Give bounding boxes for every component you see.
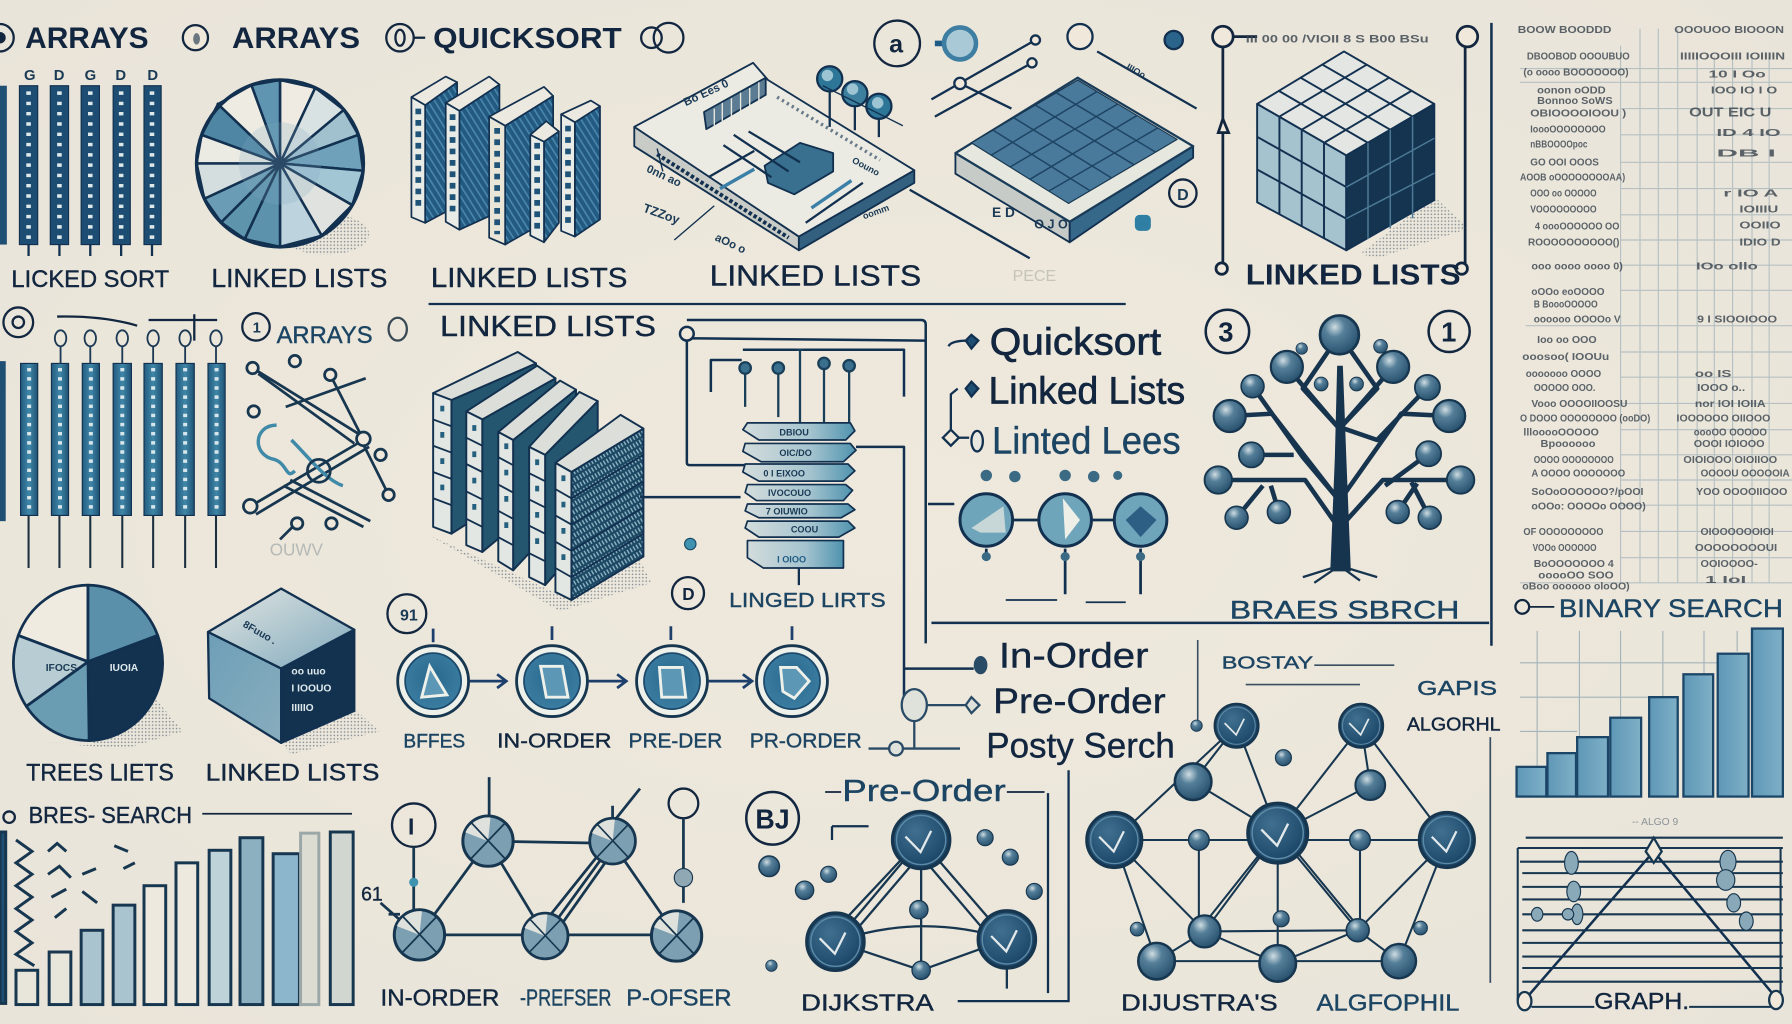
triangle [1525,851,1776,1000]
bars: array columns: G [24,68,36,84]
panel: list labels [943,320,1185,602]
stack: thick books [433,352,643,600]
label: dijkstra: DIJKSTRA [801,989,935,1015]
panel: traversal labels [869,635,1175,766]
icon: number 1 [1429,311,1470,352]
icon: number 3: 3 [1218,317,1234,348]
stack labels: IVOCOUO [768,488,811,498]
table: left column: VOOOOOOOOO [1530,205,1597,216]
edges [1114,726,1447,963]
bars: array columns: D [54,68,65,84]
cube text: IIIIIO [291,703,314,714]
panel: isometric slab [634,21,976,293]
markers [943,335,983,451]
icon: small ring [389,318,407,341]
bars: array columns: D [115,68,126,84]
cube text: oo uuo [291,666,326,677]
small notes: slab margins: Oouno [850,155,882,178]
labels [381,985,731,1011]
caption: bostay [1198,640,1394,723]
table: right column: OOOOOOOOUI [1695,543,1777,554]
bars: array columns: D [147,68,158,84]
tree: nodes [1205,315,1474,529]
table: left column: GO OOI OOOS [1530,158,1599,169]
panel: row 3 cube [206,589,379,787]
heading: quicksort: QUICKSORT [433,23,622,55]
table: left column: lllooooOOOOO [1523,427,1599,438]
process labels: IN-ORDER [497,729,611,752]
bar chart: bars [1517,629,1783,797]
stack labels: I OIOO [777,554,806,564]
small notes: slab margins: TZZoy [641,201,681,227]
label: braes sbrch: BRAES SBRCH [1230,596,1459,624]
icon: circled D [672,577,704,609]
icon: numbered circle: 1 [253,321,261,337]
label: in-order: In-Order [999,635,1149,675]
table: right column: OOOOU OOOOOIA [1701,469,1790,480]
panel: table [1518,25,1792,593]
table: right column: OIOIOOO OIOIIOO [1683,455,1777,466]
process labels: BFFES [403,730,465,752]
label: posty serch: Posty Serch [986,726,1175,766]
squiggles [16,840,135,966]
nodes [394,816,702,961]
grid: table rules [1520,29,1792,583]
icons: top circles [641,21,976,66]
divider: middle horizontal [429,303,1126,305]
pie labels: IFOCS [46,663,77,674]
icon: numbered circle: 91 [400,608,418,625]
bars: array columns: G [85,68,96,84]
label: algfophil: ALGFOPHIL [1317,989,1459,1015]
panel: traversal process [387,594,862,752]
table: right column: IDIO D [1739,238,1781,249]
panel: network one [361,777,731,1011]
table: left column: oonon oODD [1537,86,1606,97]
process labels: PRE-DER [629,729,722,752]
icon: BJ circle: BJ [755,804,790,835]
table: left column: ooosoo( IOOUu [1522,352,1609,363]
chain: three nodes [960,470,1167,602]
table: left column: B BoooOOOOO [1534,299,1598,310]
faded caption: -- ALGO 9 [1632,817,1679,828]
icons: top circles: a [889,31,904,59]
panel: row 1 books [386,23,627,293]
edges [829,840,1007,989]
icon: teal drop [685,538,696,550]
heading: bres search [3,802,352,828]
table: right column [1674,25,1790,586]
notes: plate margin [992,62,1148,232]
table: right column: IOOOOOO OIIOOO [1677,414,1770,425]
bars: array columns [0,68,161,256]
table: right column: IOOO o.. [1697,383,1745,394]
cube text: 8Fuuo . [241,619,278,647]
heading: arrays left: ARRAYS [25,22,149,55]
shadow: stipple [429,535,651,611]
table: left column: nBBOOOOpoc [1530,139,1588,150]
pie labels: IUOIA [110,663,139,674]
table: right column: IOIIIU [1739,205,1778,216]
table: left column: oOOo eoOOOO [1531,287,1605,298]
panel: graph triangle [1518,838,1783,1014]
table: right column: IOO IO I O [1711,86,1777,97]
table: right column: 10 I Oo [1709,70,1766,81]
table: left column: Bpoooooo [1541,439,1595,450]
table: right column: 9 I SIOOIOOO [1697,314,1777,325]
heading: arrays: ARRAYS [277,322,373,349]
pie chart [13,585,163,741]
panel: row 1 pie [183,22,387,293]
heading: pre-order: Pre-Order [842,773,1006,808]
label: linked lists: LINKED LISTS [211,263,387,293]
heading: arrays: ARRAYS [232,22,360,55]
table: right column: IIIIIOOOIII IOIIIIN [1680,51,1785,62]
icon: numbered circle [242,313,270,341]
nodes [759,811,1042,979]
label: linked lists: LINKED LISTS [206,760,379,787]
table: left column: IoooOOOOOOOO [1530,125,1606,136]
table: left column: A OOOO OOOOOOO [1531,469,1625,480]
heading: linked lists: LINKED LISTS [440,311,656,343]
label: dijustra's: DIJUSTRA'S [1121,989,1278,1015]
table: left column: OBIOOOOIOOU ) [1530,109,1626,120]
nodes: four circles [398,646,827,717]
table: left column: Bonnoo SoWS [1537,96,1613,107]
note: 61: 61 [361,884,383,906]
diagram: crossing lines [243,355,394,539]
process labels: PR-ORDER [750,729,862,752]
labels: P-OFSER [626,985,731,1011]
connectors: frame lines [640,320,974,699]
pins: three balls [817,66,891,137]
icon: numbered circle: I [408,813,414,839]
icon: BJ circle [746,792,799,845]
icon: numbered circle [183,25,208,50]
cube text: I IOOUO [291,683,331,694]
table: left column: OOOO OOOOOOOO [1534,455,1614,466]
table: left column: oBoo oooooo oloOO) [1522,582,1630,593]
small notes: slab margins [641,78,903,256]
notes: plate margin: E D [992,205,1015,220]
small notes: slab margins: 0nn ao [644,163,683,190]
stack labels: DBIOU [779,427,809,437]
heading: binary search: BINARY SEARCH [1559,595,1783,623]
stack labels: OIC/DO [779,448,812,458]
cube text [241,619,331,714]
table: left column: 4 oooOOOOOO OO [1535,222,1619,233]
table: right column: oooOO OOOOO [1694,427,1767,438]
icon: blue tag [1135,215,1151,231]
table: left column: OF OOOOOOOOO [1523,527,1603,538]
connector rings [869,657,986,755]
panel: network three [1087,640,1501,1015]
icon: junction ring [680,327,694,341]
table: left column: ooooooo OOOO [1526,369,1601,380]
table: left column: O DOOO OOOOOOOO (ooDO) [1520,414,1650,425]
panel: crossing arrows [242,313,407,559]
table: right column: nor IOI IOIIA [1695,399,1766,410]
label: gapis: GAPIS [1417,677,1497,700]
icon: circled D: D [682,584,695,604]
panel: bottom bar chart [0,802,353,1005]
table: right column: 1 IoI [1705,575,1747,586]
table: left column: DBOOBOD OOOUBUO [1527,51,1630,62]
cube faces [208,589,354,743]
bars: array columns [0,330,225,568]
icon: small ring [669,789,698,818]
table: left column: oOOo: OOOOo OOOO) [1531,502,1646,513]
icon: numbered circle [387,594,426,633]
stack: tall books [411,77,600,245]
pie chart: segments [197,80,363,247]
stack labels: 7 OIUWIO [766,506,808,516]
panel: row 1 arrays [0,22,169,293]
caption: rail text: III 00 00 /VIOII 8 S B00 BSu [1246,33,1429,45]
frame [832,770,1069,1001]
shadow [46,697,183,749]
bar chart grid [1520,631,1749,766]
panel: row 2 arrays [0,307,225,568]
table: right column: r IO A [1723,189,1779,200]
tree: branches [1218,335,1461,583]
labels: -PREFSER [520,985,611,1011]
edges [381,777,683,939]
table: left column: Ioo oo OOO [1537,335,1597,346]
panel: row 3 pie [13,585,183,787]
table: left column: VOOo OOOOOO [1533,543,1597,554]
process labels [403,729,862,752]
faded text: OUWV [270,539,324,559]
table: right column: OIOOOOOOIOI [1701,527,1774,538]
label: trees liets: TREES LIETS [26,760,174,787]
frame: rings and rails [1213,26,1478,274]
small notes: slab margins: aOo o [713,232,747,256]
label: linged lirts: LINGED LIRTS [729,589,886,612]
icon: number 3 [1206,310,1249,353]
table: left column: ROOOOOOOOOO() [1528,238,1619,249]
notes: plate margin: O J O [1034,218,1068,232]
panel: cube [1213,26,1478,292]
bars [0,832,353,1005]
flow arrows [433,626,792,688]
icon: number 1: 1 [1441,317,1456,348]
table: right column: IOo ollo [1696,262,1758,273]
label: quicksort: Quicksort [990,320,1162,362]
nodes [1518,838,1783,1010]
table: right column: OOIOOOO- [1701,559,1758,570]
icon: circled letter: D [1177,187,1189,204]
table: right column: OOIIO [1739,221,1781,232]
table: right column: OOOI IOIOOO [1694,439,1765,450]
table: left column: Vooo OOOOIIOOSU [1531,399,1627,410]
table: left column: AOOB oOOOOOOOOAA) [1520,173,1625,184]
shadow [281,709,379,754]
table: left column: BOOW BOODDD [1518,25,1611,36]
slab: isometric board [634,63,914,250]
label: pre-order: Pre-Order [993,681,1166,721]
table: right column: DB I [1717,149,1776,160]
rule [1489,737,1491,983]
pie labels [46,663,139,674]
icon: numbered circle [392,803,435,847]
stack labels: 0 I EIXOO [763,469,805,479]
heading: bres search: BRES- SEARCH [29,802,192,828]
table: right column: ID 4 IO [1717,128,1781,139]
stack labels: COOU [791,525,819,535]
faded text: PECE [1013,268,1056,285]
cube: grid [1257,51,1434,250]
label: licked sort: LICKED SORT [11,266,169,293]
notes: plate margin: IIIOo [1125,62,1148,81]
label: linked lists: LINKED LISTS [1246,260,1461,292]
panel: isometric grid plate [910,24,1197,285]
table: left column: SoOoOOOOOO?/pOOI [1531,487,1644,498]
connectors: upper lines [910,24,1197,258]
panel: stack and connectors [640,320,974,699]
rules [1518,838,1783,1007]
stack labels [763,427,819,564]
table: left column: OOO oo OOOOO [1530,189,1597,200]
icon: ring with dash [386,24,425,51]
divider: upper right vertical [931,23,1491,646]
shadow: cube [1360,197,1469,258]
stack: layered blocks [743,423,856,568]
label: linted lees: Linted Lees [992,420,1181,462]
label: graph: GRAPH. [1594,988,1689,1014]
label: algorhl: ALGORHL [1407,713,1501,734]
label: linked lists: LINKED LISTS [710,261,921,293]
label: linked lists: LINKED LISTS [431,262,627,293]
table: left column: ooooOO SOO [1538,570,1614,581]
table: right column: oo IS [1695,369,1732,380]
table: left column: ooo oooo oooo 0) [1531,262,1623,273]
table: left column: oooooo OOOOo V [1534,314,1621,325]
table: right column: OOOUOO BIOOON [1674,25,1784,36]
panel: tree [1205,310,1474,624]
table: left column: OOOOO OOO. [1534,383,1596,394]
table: left column [1518,25,1650,593]
nodes [1087,704,1474,982]
table: right column: YOO OOOOIIOOO [1696,487,1787,498]
panel: network two [746,770,1069,1015]
icon: ring [3,307,217,341]
table: left column: (o oooo BOOOOOOO) [1523,67,1629,78]
caption: bostay: BOSTAY [1222,653,1314,673]
small notes: slab margins: oomm [861,203,890,221]
shadow: pie [282,214,369,255]
plate: blue grid [955,78,1193,242]
table: right column: OUT EIC U [1689,106,1771,120]
stem [798,568,800,585]
icon: circled letter [1169,179,1197,207]
label: linked lists: Linked Lists [989,369,1185,411]
small notes: slab margins: Bo Ees 0 [682,78,731,109]
panel: binary search [1515,595,1783,828]
table: left column: BoOOOOOOO 4 [1534,559,1614,570]
pins: stack inputs [739,350,855,425]
labels: IN-ORDER [381,985,499,1011]
panel: row 2 books [429,311,656,611]
